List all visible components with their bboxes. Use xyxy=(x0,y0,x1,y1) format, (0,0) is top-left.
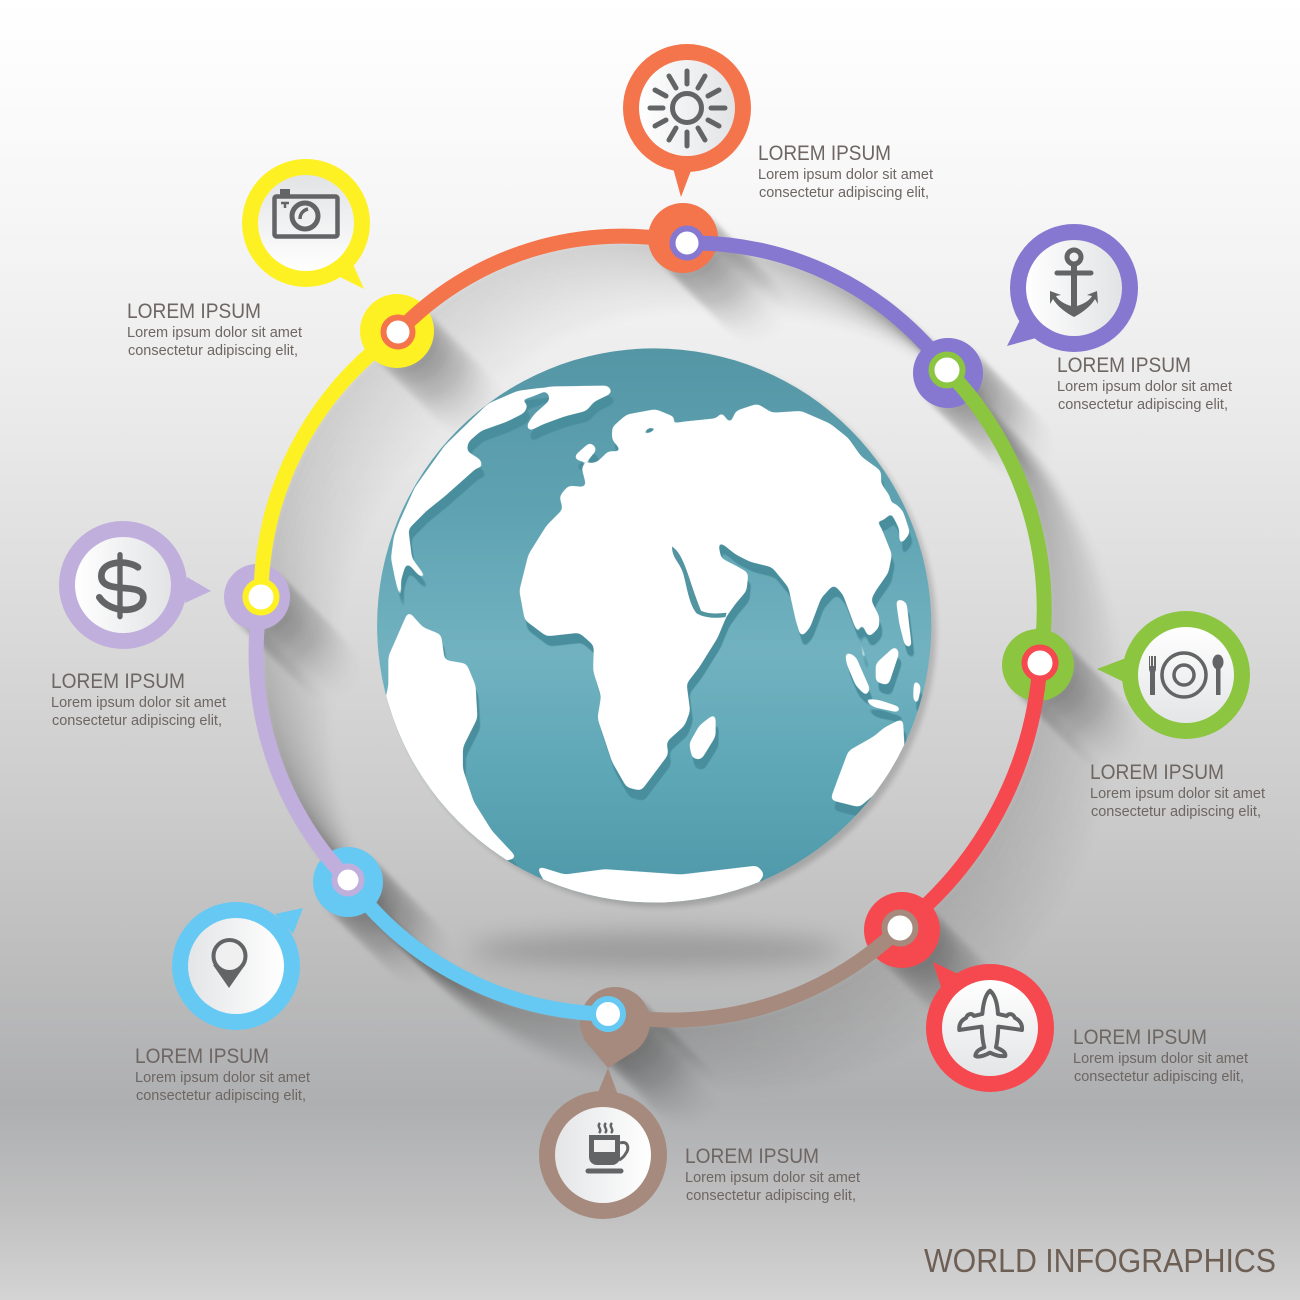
text: sun: Lorem ipsum dolor sit amet xyxy=(758,167,933,183)
icon: map marker xyxy=(213,940,246,988)
text: sun: LOREM IPSUM xyxy=(758,142,891,165)
continents xyxy=(379,385,921,915)
title: WORLD INFOGRAPHICS xyxy=(924,1242,1276,1279)
text: anchor: consectetur adipiscing elit, xyxy=(1058,397,1228,413)
long shadows of ring and nodes xyxy=(229,208,1144,1127)
text: coffee: LOREM IPSUM xyxy=(685,1145,819,1168)
icon: camera xyxy=(274,189,338,236)
pin: camera xyxy=(242,159,370,289)
continent shadows xyxy=(382,396,924,925)
text: airplane: consectetur adipiscing elit, xyxy=(1074,1069,1244,1085)
text: coffee xyxy=(685,1145,860,1204)
pin: coffee xyxy=(539,1068,667,1219)
text: dollar xyxy=(51,670,226,729)
icon: dollar sign xyxy=(99,555,143,617)
text: anchor: LOREM IPSUM xyxy=(1057,354,1191,377)
text: dollar: Lorem ipsum dolor sit amet xyxy=(51,695,226,711)
icon: sun xyxy=(650,71,725,146)
text: camera xyxy=(127,300,302,359)
text: airplane: LOREM IPSUM xyxy=(1073,1026,1207,1049)
pin: airplane xyxy=(926,962,1054,1092)
text: coffee: consectetur adipiscing elit, xyxy=(686,1188,856,1204)
text: camera: consectetur adipiscing elit, xyxy=(128,343,298,359)
icon: plate and cutlery xyxy=(1149,653,1224,697)
pin: location xyxy=(172,902,303,1030)
ring arcs xyxy=(256,236,1044,1020)
pin: sun xyxy=(623,44,751,197)
text: sun: consectetur adipiscing elit, xyxy=(759,185,929,201)
icon: coffee cup xyxy=(588,1123,628,1171)
text: anchor xyxy=(1057,354,1232,413)
text: dining: Lorem ipsum dolor sit amet xyxy=(1090,786,1265,802)
pin: dollar xyxy=(59,521,211,649)
text: dollar: LOREM IPSUM xyxy=(51,670,185,693)
text: anchor: Lorem ipsum dolor sit amet xyxy=(1057,379,1232,395)
text: dining: consectetur adipiscing elit, xyxy=(1091,804,1261,820)
text: location xyxy=(135,1045,310,1104)
text: dining xyxy=(1090,761,1265,820)
text: location: consectetur adipiscing elit, xyxy=(136,1088,306,1104)
node discs xyxy=(224,203,1074,1068)
text: sun xyxy=(758,142,933,201)
icon: anchor xyxy=(1050,250,1098,317)
ocean xyxy=(377,348,931,903)
node markers xyxy=(246,228,1056,1029)
globe xyxy=(377,348,936,925)
text: camera: Lorem ipsum dolor sit amet xyxy=(127,325,302,341)
icon: airplane xyxy=(959,991,1022,1057)
text: airplane xyxy=(1073,1026,1248,1085)
text: airplane: Lorem ipsum dolor sit amet xyxy=(1073,1051,1248,1067)
red sea and gulf of aden xyxy=(672,547,727,618)
text: dollar: consectetur adipiscing elit, xyxy=(52,713,222,729)
text: location: Lorem ipsum dolor sit amet xyxy=(135,1070,310,1086)
text: camera: LOREM IPSUM xyxy=(127,300,261,323)
text: coffee: Lorem ipsum dolor sit amet xyxy=(685,1170,860,1186)
text: dining: LOREM IPSUM xyxy=(1090,761,1224,784)
ground shadow under globe xyxy=(470,933,840,967)
text: location: LOREM IPSUM xyxy=(135,1045,269,1068)
pin: dining xyxy=(1097,611,1250,739)
pin: anchor xyxy=(1007,224,1138,352)
